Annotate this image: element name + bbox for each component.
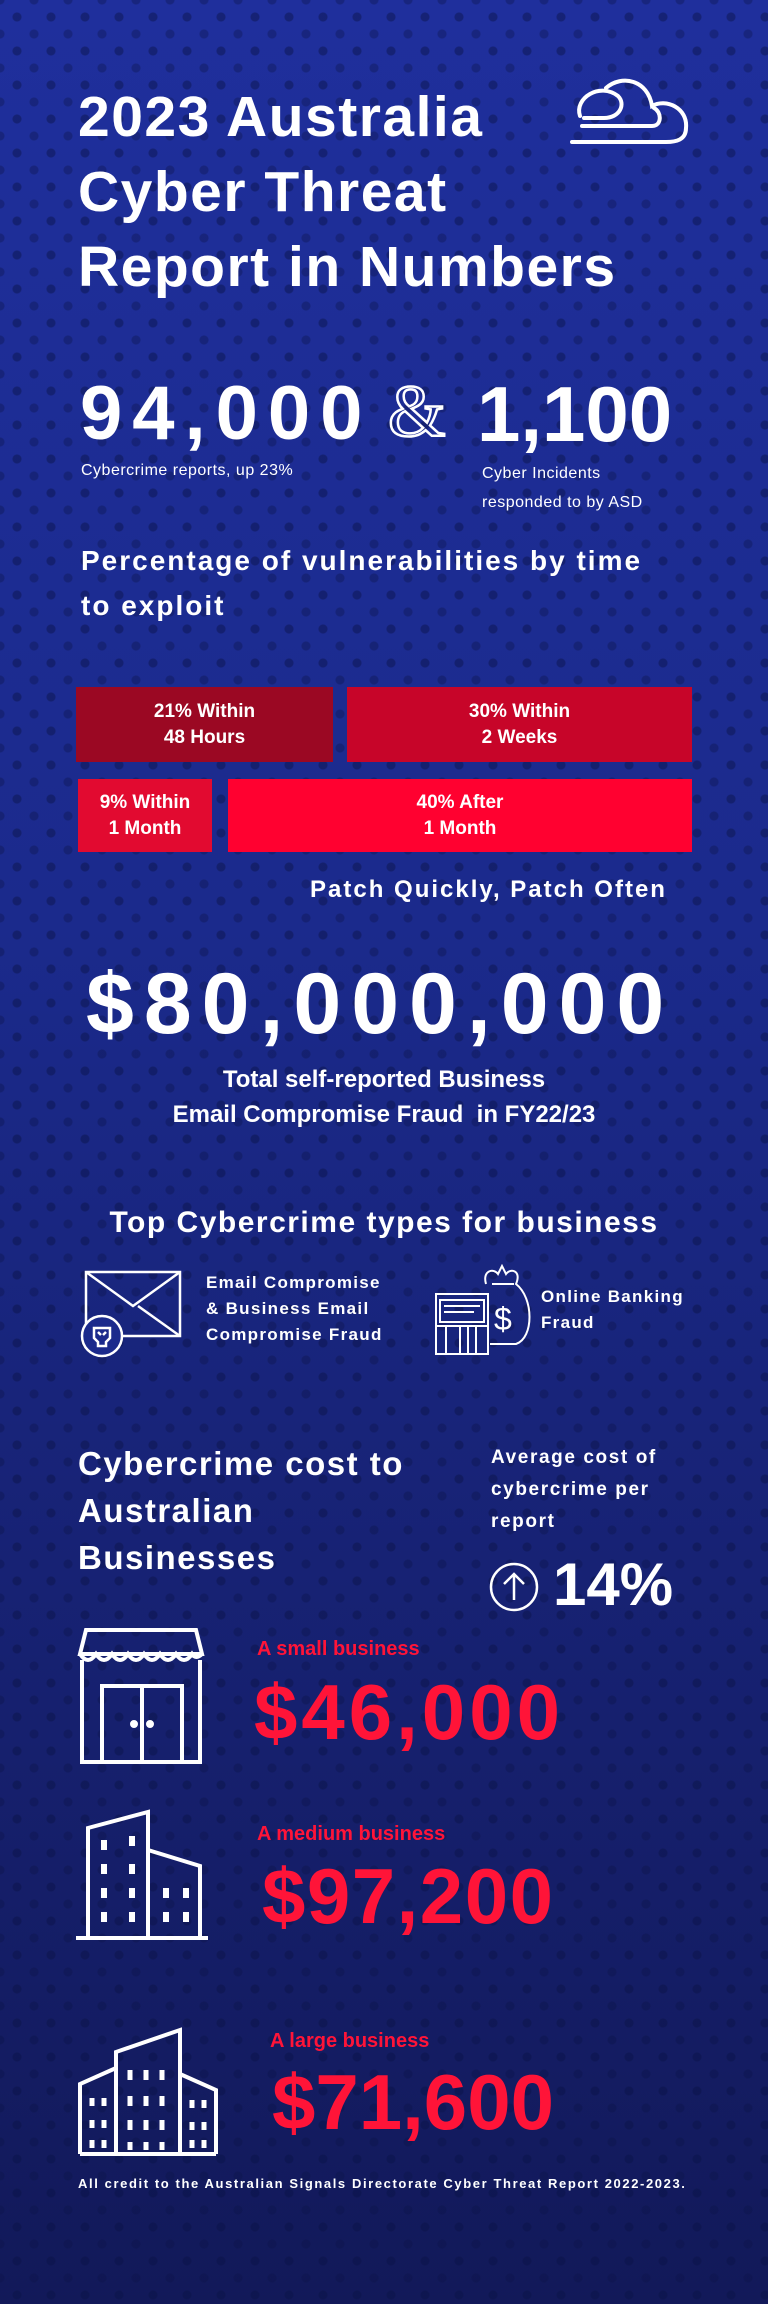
block: 40%: 1 Month [424,818,496,838]
caption: BEC fraud: Total self-reported Business [223,1066,545,1093]
heading: cost to businesses [78,1445,404,1576]
caption: incidents: responded to by ASD [482,494,643,511]
heading: vulnerabilities: to exploit [81,590,225,621]
icon: large building [78,2027,218,2156]
icon: bank and money bag: $ [494,1301,512,1337]
caption: BEC fraud [173,1066,595,1128]
icon: bank and money bag [435,1264,530,1355]
heading: cost to businesses: Cybercrime cost to [78,1445,404,1482]
caption: incidents [482,465,643,511]
block: 21%: 21% Within [154,700,255,722]
block: 40%: 40% After [417,792,503,812]
text: online banking: Online Banking [541,1287,684,1306]
block: 30%: 30% Within [469,700,570,722]
icon: medium building [76,1809,208,1940]
label: large business: A large business [270,2030,429,2052]
footer credit: All credit to the Australian Signals Directorate Cyber Threat Report 2022-2023. [78,2176,687,2191]
title: Report in Numbers [78,235,617,299]
text: email compromise: Email Compromise [206,1273,381,1292]
block: 9% [78,779,212,852]
title: 2023 Australia [78,85,483,149]
caption: reports: Cybercrime reports, up 23% [81,462,293,479]
stat: 94,000: 94,000 [80,371,372,456]
block: 21% [76,687,333,762]
block: 40% [228,779,692,852]
label: small business: A small business [257,1638,420,1660]
text: online banking: Fraud [541,1313,595,1332]
caption: BEC fraud: Email Compromise Fraud in FY22/23 [173,1101,595,1128]
heading: top cybercrime types: Top Cybercrime types for business [109,1206,659,1239]
stat: $80,000,000: $80,000,000 [86,956,674,1052]
text: email compromise: Compromise Fraud [206,1325,383,1344]
heading: cost to businesses: Businesses [78,1539,276,1576]
text: average cost: report [491,1511,556,1532]
heading: cost to businesses: Australian [78,1492,254,1529]
icon: envelope [80,1270,182,1358]
text: email compromise: & Business Email [206,1299,369,1318]
block: 30%: 2 Weeks [482,726,557,748]
stat: $71,600: $71,600 [272,2058,554,2146]
icon: cloud [570,78,688,144]
text: email compromise [206,1273,383,1344]
title: Cyber Threat [78,160,448,224]
tagline: patch: Patch Quickly, Patch Often [310,876,667,903]
block: 9%: 1 Month [109,818,181,838]
chart: time to exploit blocks [76,687,692,852]
label: medium business: A medium business [257,1823,445,1845]
text: average cost: cybercrime per [491,1479,650,1500]
block: 21%: 48 Hours [164,726,245,748]
caption: incidents: Cyber Incidents [482,465,601,482]
block: 9%: 9% Within [100,792,190,812]
block: 30% [347,687,692,762]
heading: vulnerabilities: Percentage of vulnerabilities by time [81,545,642,576]
stat: 14%: 14% [553,1551,673,1618]
stat: 1,100: 1,100 [477,370,672,458]
stat: $97,200: $97,200 [262,1852,554,1940]
heading: vulnerabilities [81,545,642,621]
icon: shop [78,1628,204,1764]
icon: up arrow circle [490,1562,538,1612]
text: average cost: Average cost of [491,1447,657,1468]
stat: $46,000: $46,000 [254,1668,564,1756]
title [78,85,617,299]
text: online banking [541,1287,684,1332]
text: average cost [491,1447,657,1532]
